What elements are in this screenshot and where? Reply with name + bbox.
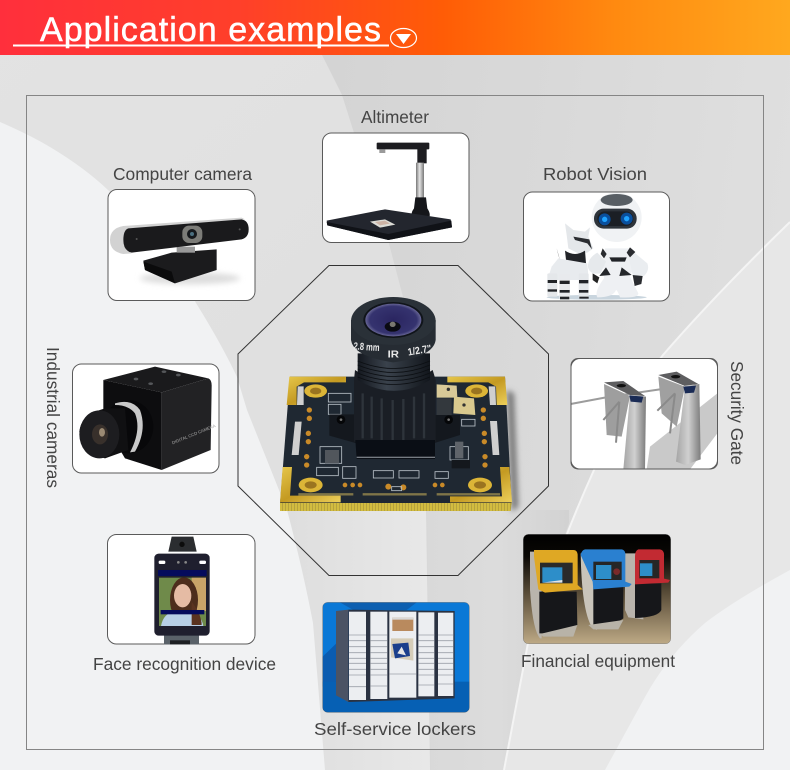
content frame <box>26 96 764 750</box>
silkscreen components <box>317 393 475 491</box>
icon: down arrow badge <box>390 28 416 48</box>
lens cap: IR <box>388 349 400 360</box>
threaded barrel <box>358 353 430 391</box>
panel: Industrial cameras <box>43 347 219 488</box>
gold board edge <box>280 503 512 511</box>
panel: Self-service lockers <box>314 602 476 739</box>
card frame <box>322 133 469 242</box>
label: Altimeter: Altimeter <box>361 107 429 127</box>
lens holder wings <box>329 414 460 443</box>
board slots <box>292 386 499 455</box>
panel: Altimeter <box>322 107 469 242</box>
dog <box>565 223 593 253</box>
icon: face terminal <box>154 537 210 644</box>
icon: box camera: DIGITAL CCD CAMERA <box>171 423 216 445</box>
label: Computer camera: Computer camera <box>113 164 252 184</box>
gold corner contacts <box>280 377 512 502</box>
label: Robot Vision: Robot Vision <box>543 164 647 184</box>
mounting holes <box>299 384 492 492</box>
label: Self-service lockers: Self-service lockers <box>314 719 476 739</box>
kiosk blue <box>581 549 632 630</box>
title underline <box>13 44 389 46</box>
panel: Computer camera <box>108 164 255 300</box>
kiosk red <box>625 549 670 619</box>
panel: Security Gate <box>571 358 747 469</box>
panel: Face recognition device <box>93 534 276 674</box>
icon: locker bank <box>323 602 469 712</box>
label: Industrial cameras: Industrial cameras <box>43 347 63 488</box>
lens cap: 1/2.7" <box>407 344 433 359</box>
card frame <box>108 190 255 300</box>
central octagon <box>238 266 548 576</box>
lens cap <box>351 297 436 362</box>
card frame <box>72 364 219 473</box>
icon: document stand <box>327 143 452 240</box>
kiosk yellow <box>530 550 583 638</box>
robot <box>596 248 638 297</box>
title: Application examples <box>40 11 381 49</box>
panel: Financial equipment <box>521 534 675 671</box>
label: Security Gate: Security Gate <box>727 361 747 465</box>
card frame <box>108 534 255 644</box>
icon: turnstile gates <box>571 372 717 469</box>
icon: three kiosks <box>523 534 671 644</box>
lens holder <box>354 370 436 459</box>
header banner <box>0 0 790 55</box>
icon: webcam <box>110 218 249 284</box>
card frame <box>571 358 718 469</box>
card outline <box>571 358 718 469</box>
SMD microphones <box>437 384 475 415</box>
lens cap: 2.8 mm <box>353 341 380 354</box>
gold traces <box>298 491 500 498</box>
icon: robot and dog <box>547 193 648 300</box>
label: Financial equipment: Financial equipment <box>521 651 675 671</box>
camera module <box>280 297 518 512</box>
card frame <box>524 192 670 301</box>
solder pads <box>304 407 488 490</box>
icon: box camera <box>79 367 216 470</box>
board shadow <box>507 390 518 512</box>
label: Face recognition device: Face recognition device <box>93 654 276 674</box>
circuit board <box>280 377 512 504</box>
panel: Robot Vision <box>524 164 670 301</box>
